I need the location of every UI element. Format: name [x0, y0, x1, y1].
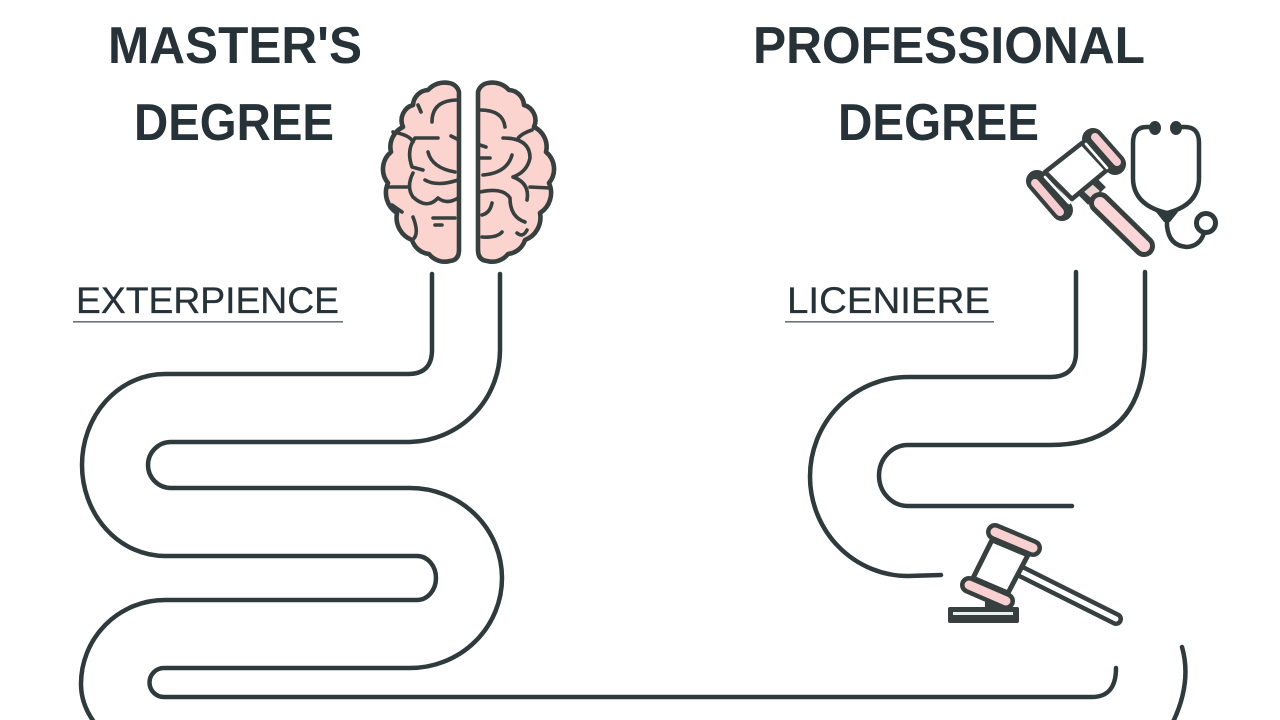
- head: [1045, 143, 1107, 199]
- title: master's degree: [108, 17, 362, 152]
- winding path: master's degree: [81, 274, 1116, 720]
- lower cap: [1035, 177, 1069, 212]
- title: professional degree: [753, 17, 1145, 152]
- icon: brain: [383, 83, 554, 262]
- icon: gavel with pink handle: [1035, 137, 1144, 246]
- title: professional degree: PROFESSIONAL: [753, 17, 1145, 75]
- label: liceniere: LICENIERE: [787, 280, 990, 321]
- lower cap: [969, 585, 1006, 601]
- head: [973, 540, 1028, 593]
- icon: stethoscope: [1133, 121, 1216, 247]
- handle: [1022, 572, 1116, 619]
- upper cap: [1086, 137, 1117, 168]
- label: exterpience: EXTERPIENCE: [76, 280, 339, 321]
- title: master's degree: DEGREE: [134, 94, 334, 152]
- winding path: professional degree: [810, 272, 1185, 720]
- base: [948, 600, 1019, 623]
- handle: [1086, 186, 1144, 246]
- left hemisphere: [383, 83, 459, 262]
- icon: gavel on base: [948, 532, 1116, 623]
- upper cap: [995, 532, 1033, 548]
- title: professional degree: DEGREE: [838, 94, 1039, 152]
- title: master's degree: MASTER'S: [108, 17, 362, 75]
- right hemisphere: [478, 83, 554, 262]
